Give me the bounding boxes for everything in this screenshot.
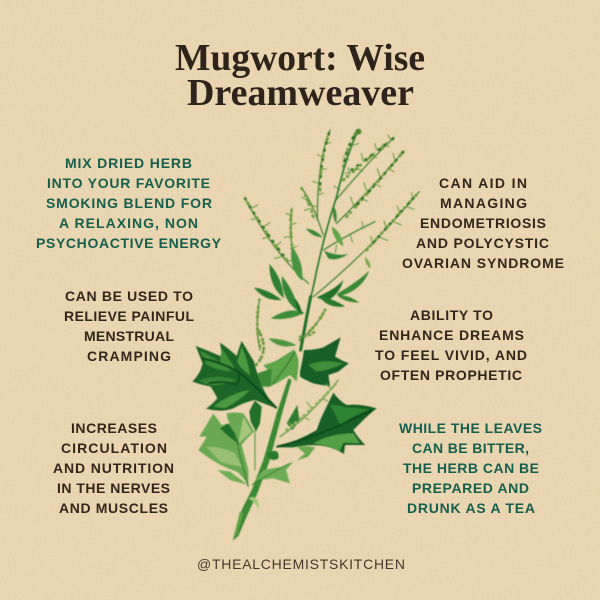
text block: smoking blend: INTO YOUR FAVORITE [47,175,210,191]
footer handle: @THEALCHEMISTSKITCHEN [197,556,405,572]
upper leaves [254,205,370,319]
leaf: top right dark [300,337,349,386]
text block: dreams: TO FEEL VIVID, AND [375,347,527,363]
main stem upper [300,133,357,350]
side twigs [251,135,414,261]
text block: dreams: OFTEN PROPHETIC [380,367,522,383]
text block: menstrual cramping: MENSTRUAL [84,328,174,344]
text block: tea: PREPARED AND [412,480,529,496]
text block: tea: CAN BE BITTER, [412,440,529,456]
text block: tea: WHILE THE LEAVES [399,420,542,436]
text block: endometriosis: AND POLYCYSTIC [416,235,549,251]
text block: endometriosis: MANAGING [440,195,527,211]
text block: smoking blend [36,155,222,251]
lower stem [233,378,292,541]
text block: endometriosis: OVARIAN SYNDROME [402,255,564,271]
text block: circulation: INCREASES [71,420,157,436]
flower buds [245,130,419,347]
text block: tea: THE HERB CAN BE [403,460,539,476]
text block: dreams: ABILITY TO [410,307,493,323]
text block: tea [399,420,542,516]
leaf: lower left pale [198,412,254,485]
text block: circulation: AND NUTRITION [53,460,174,476]
text block: endometriosis: ENDOMETRIOSIS [420,215,546,231]
text block: dreams: ENHANCE DREAMS [379,327,524,343]
title: Dreamweaver [187,72,414,114]
upper flowering branches [245,129,419,350]
title: Mugwort: Wise [175,37,425,79]
text block: circulation [53,420,174,516]
lower leaves and stem [192,330,377,541]
text block: circulation: CIRCULATION [61,440,167,456]
text block: menstrual cramping: CAN BE USED TO [65,288,193,304]
leaf: large left [192,341,277,411]
text block: menstrual cramping: RELIEVE PAINFUL [64,308,194,324]
illustration: mugwort plant [192,129,419,541]
text block: endometriosis: CAN AID IN [439,175,527,191]
text block: circulation: AND MUSCLES [59,500,168,516]
leaf: top middle pale [263,349,299,387]
text block: tea: DRUNK AS A TEA [407,500,535,516]
leaf: small centre [249,401,262,432]
leaf: right big [275,393,377,454]
text block: menstrual cramping [64,288,194,364]
lower flower sprigs [255,330,338,470]
title [175,37,425,114]
branch stems [245,130,419,350]
text block: circulation: IN THE NERVES [57,480,170,496]
text block: menstrual cramping: CRAMPING [87,348,171,364]
text block: smoking blend: SMOKING BLEND FOR [46,195,212,211]
leaf: lower curled [217,470,248,485]
text block: smoking blend: PSYCHOACTIVE ENERGY [36,235,222,251]
text block: smoking blend: A RELAXING, NON [59,215,198,231]
text block: dreams [375,307,527,383]
text block: smoking blend: MIX DRIED HERB [65,155,192,171]
text block: endometriosis [402,175,564,271]
